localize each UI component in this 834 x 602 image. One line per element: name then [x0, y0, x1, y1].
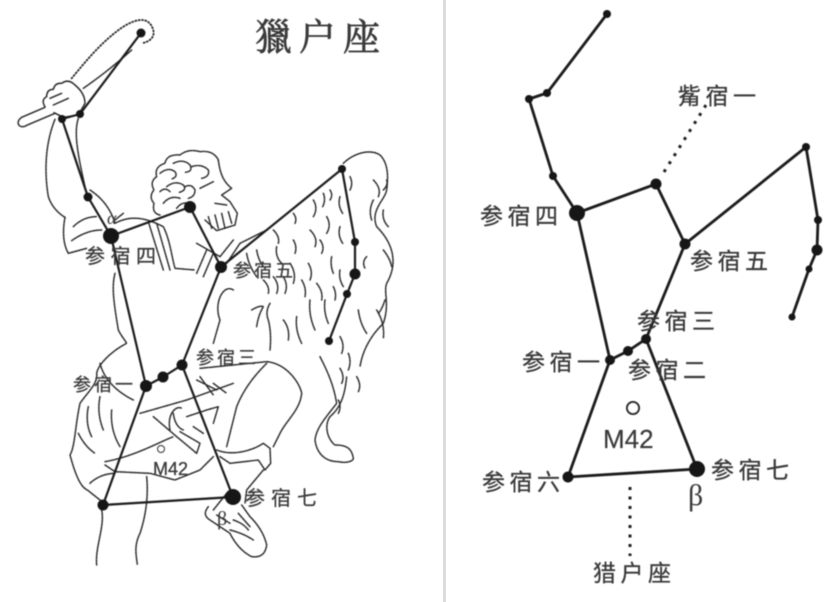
- right stars: [525, 10, 822, 482]
- panel divider: [443, 0, 446, 602]
- left star labels: M42: [153, 459, 188, 479]
- club: [18, 20, 154, 127]
- right star labels: 参宿三: [637, 308, 720, 334]
- panel: illustrated Orion figure: [18, 17, 393, 565]
- right star labels: 参宿七: [711, 457, 794, 483]
- lion pelt: [247, 152, 393, 462]
- left star labels: 参宿五: [233, 261, 296, 281]
- left star labels: [73, 208, 323, 530]
- M42 marker, left: [158, 446, 164, 452]
- dotted pointer lines: [630, 105, 706, 556]
- left star labels: α: [107, 208, 117, 228]
- right star labels: 参宿四: [480, 203, 562, 229]
- left constellation lines: [62, 33, 355, 505]
- right star labels: β: [688, 479, 703, 512]
- left star labels: 参宿三: [196, 348, 259, 368]
- right star labels: [480, 83, 794, 586]
- left star labels: 参宿四: [85, 245, 162, 268]
- right star labels: 参宿一: [522, 349, 604, 375]
- right star labels: M42: [603, 424, 654, 454]
- head, hair and beard: [151, 151, 267, 277]
- right star labels: 猎户座: [593, 560, 676, 586]
- panel: constellation diagram: [480, 10, 822, 586]
- right constellation lines: [529, 14, 818, 477]
- right star labels: 参宿二: [628, 357, 710, 383]
- left stars: [58, 28, 360, 510]
- M42 nebula marker: [627, 402, 639, 414]
- sandal: [205, 470, 267, 557]
- left star labels: 参宿一: [73, 375, 136, 395]
- right star labels: 参宿六: [482, 469, 564, 495]
- torso and legs: [70, 273, 302, 565]
- raised hand and arm: [43, 81, 195, 270]
- title: 獵户座: [255, 17, 387, 59]
- left star labels: β: [217, 508, 227, 530]
- hunter line drawing: [18, 20, 393, 565]
- right star labels: 觜宿一: [678, 83, 760, 109]
- right star labels: 参宿五: [690, 248, 772, 274]
- left star labels: 参宿七: [245, 487, 323, 510]
